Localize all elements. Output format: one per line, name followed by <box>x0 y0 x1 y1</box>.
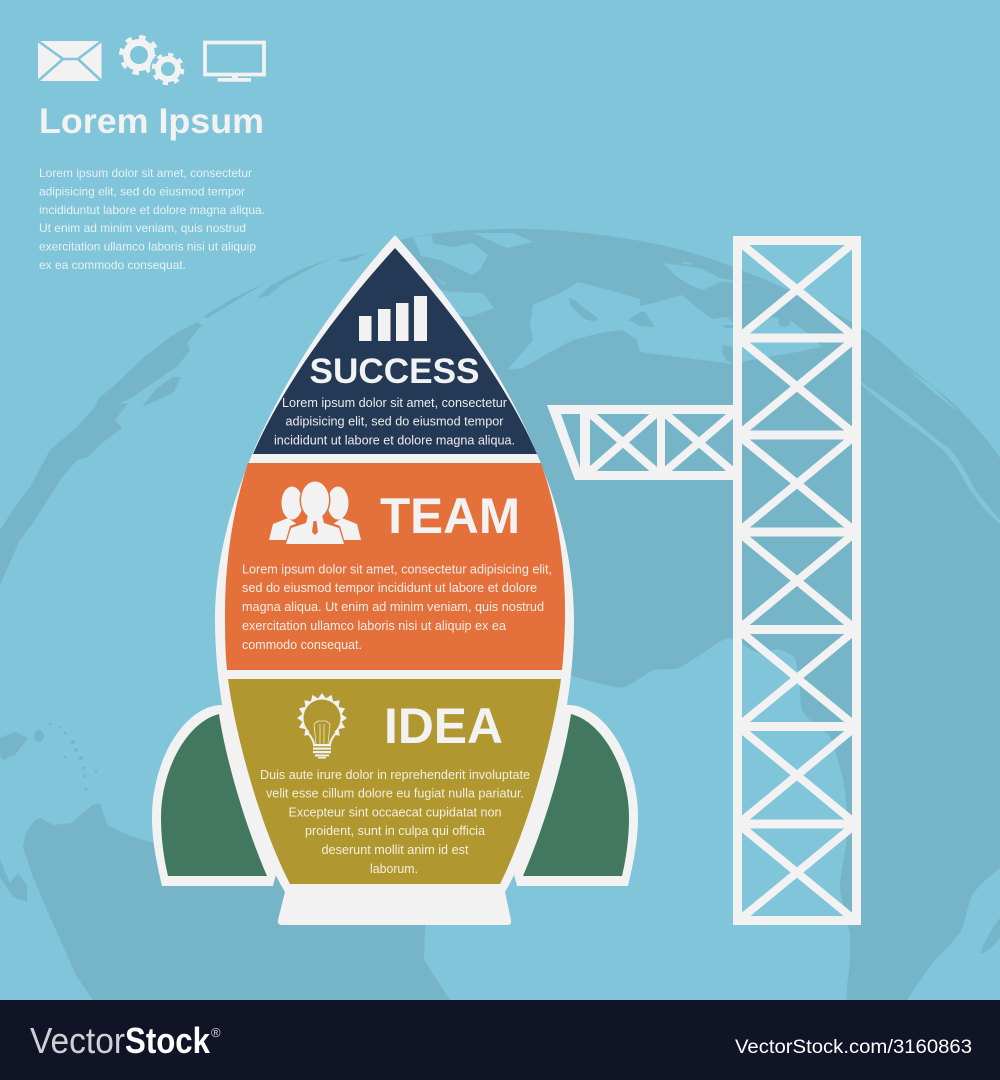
icon: envelope <box>38 41 102 81</box>
footer logo: VectorStock: Vector <box>30 1020 125 1061</box>
team text: sed do eiusmod tempor incididunt ut labore et dolore <box>242 581 537 595</box>
intro text block: ex ea commodo consequat. <box>39 258 186 272</box>
heading: idea: IDEA <box>384 698 503 754</box>
left fin <box>152 705 300 886</box>
footer image id: VectorStock.com/3160863 <box>735 1037 972 1058</box>
crane arm <box>547 405 737 480</box>
icon: monitor <box>205 42 264 82</box>
left fin fill <box>161 714 267 876</box>
team text: Lorem ipsum dolor sit amet, consectetur adipisicing elit, <box>242 562 552 576</box>
icon: bar chart <box>359 296 427 341</box>
success text: incididunt ut labore et dolore magna aliqua. <box>274 434 515 448</box>
intro text block: Lorem ipsum dolor sit amet, consectetur <box>39 166 252 180</box>
panel: idea <box>228 679 561 884</box>
intro text block: Ut enim ad minim veniam, quis nostrud <box>39 221 246 235</box>
idea text: laborum. <box>370 862 418 876</box>
rocket body <box>215 235 574 925</box>
intro text block: exercitation ullamco laboris nisi ut aliquip <box>39 240 256 254</box>
right fin fill <box>523 714 629 876</box>
team text: exercitation ullamco laboris nisi ut aliquip ex ea <box>242 619 507 633</box>
team text: magna aliqua. Ut enim ad minim veniam, quis nostrud <box>242 600 544 614</box>
team text <box>242 562 552 652</box>
intro text block: incididuntut labore et dolore magna aliqua. <box>39 203 265 217</box>
footer logo: VectorStock: Stock <box>125 1020 211 1061</box>
world map background <box>0 229 1000 1000</box>
success text <box>274 396 515 448</box>
idea text: proident, sunt in culpa qui officia <box>305 824 486 838</box>
idea text <box>260 768 530 876</box>
intro text block <box>39 166 265 272</box>
idea text: deserunt mollit anim id est <box>322 843 469 857</box>
panel: team <box>225 463 565 670</box>
icon: team people <box>269 480 361 545</box>
crane tower <box>738 240 856 921</box>
title: Lorem Ipsum <box>39 101 264 141</box>
success text: adipisicing elit, sed do eiusmod tempor <box>286 414 504 428</box>
heading: success: SUCCESS <box>310 351 480 391</box>
rocket outline and base <box>215 235 574 925</box>
idea text: velit esse cillum dolore eu fugiat nulla pariatur. <box>266 786 524 800</box>
idea text: Duis aute irure dolor in reprehenderit involuptate <box>260 768 530 782</box>
footer bar <box>0 1000 1000 1080</box>
footer logo: VectorStock: ® <box>211 1025 221 1040</box>
success text: Lorem ipsum dolor sit amet, consectetur <box>282 396 507 410</box>
footer logo: VectorStock <box>30 1020 221 1061</box>
panel: success <box>253 248 537 454</box>
right fin <box>490 705 638 886</box>
icon: light bulb <box>297 693 347 760</box>
heading: team: TEAM <box>380 488 520 544</box>
team text: commodo consequat. <box>242 638 362 652</box>
intro text block: adipisicing elit, sed do eiusmod tempor <box>39 184 245 198</box>
icon: gears <box>121 37 186 87</box>
idea text: Excepteur sint occaecat cupidatat non <box>288 806 502 820</box>
